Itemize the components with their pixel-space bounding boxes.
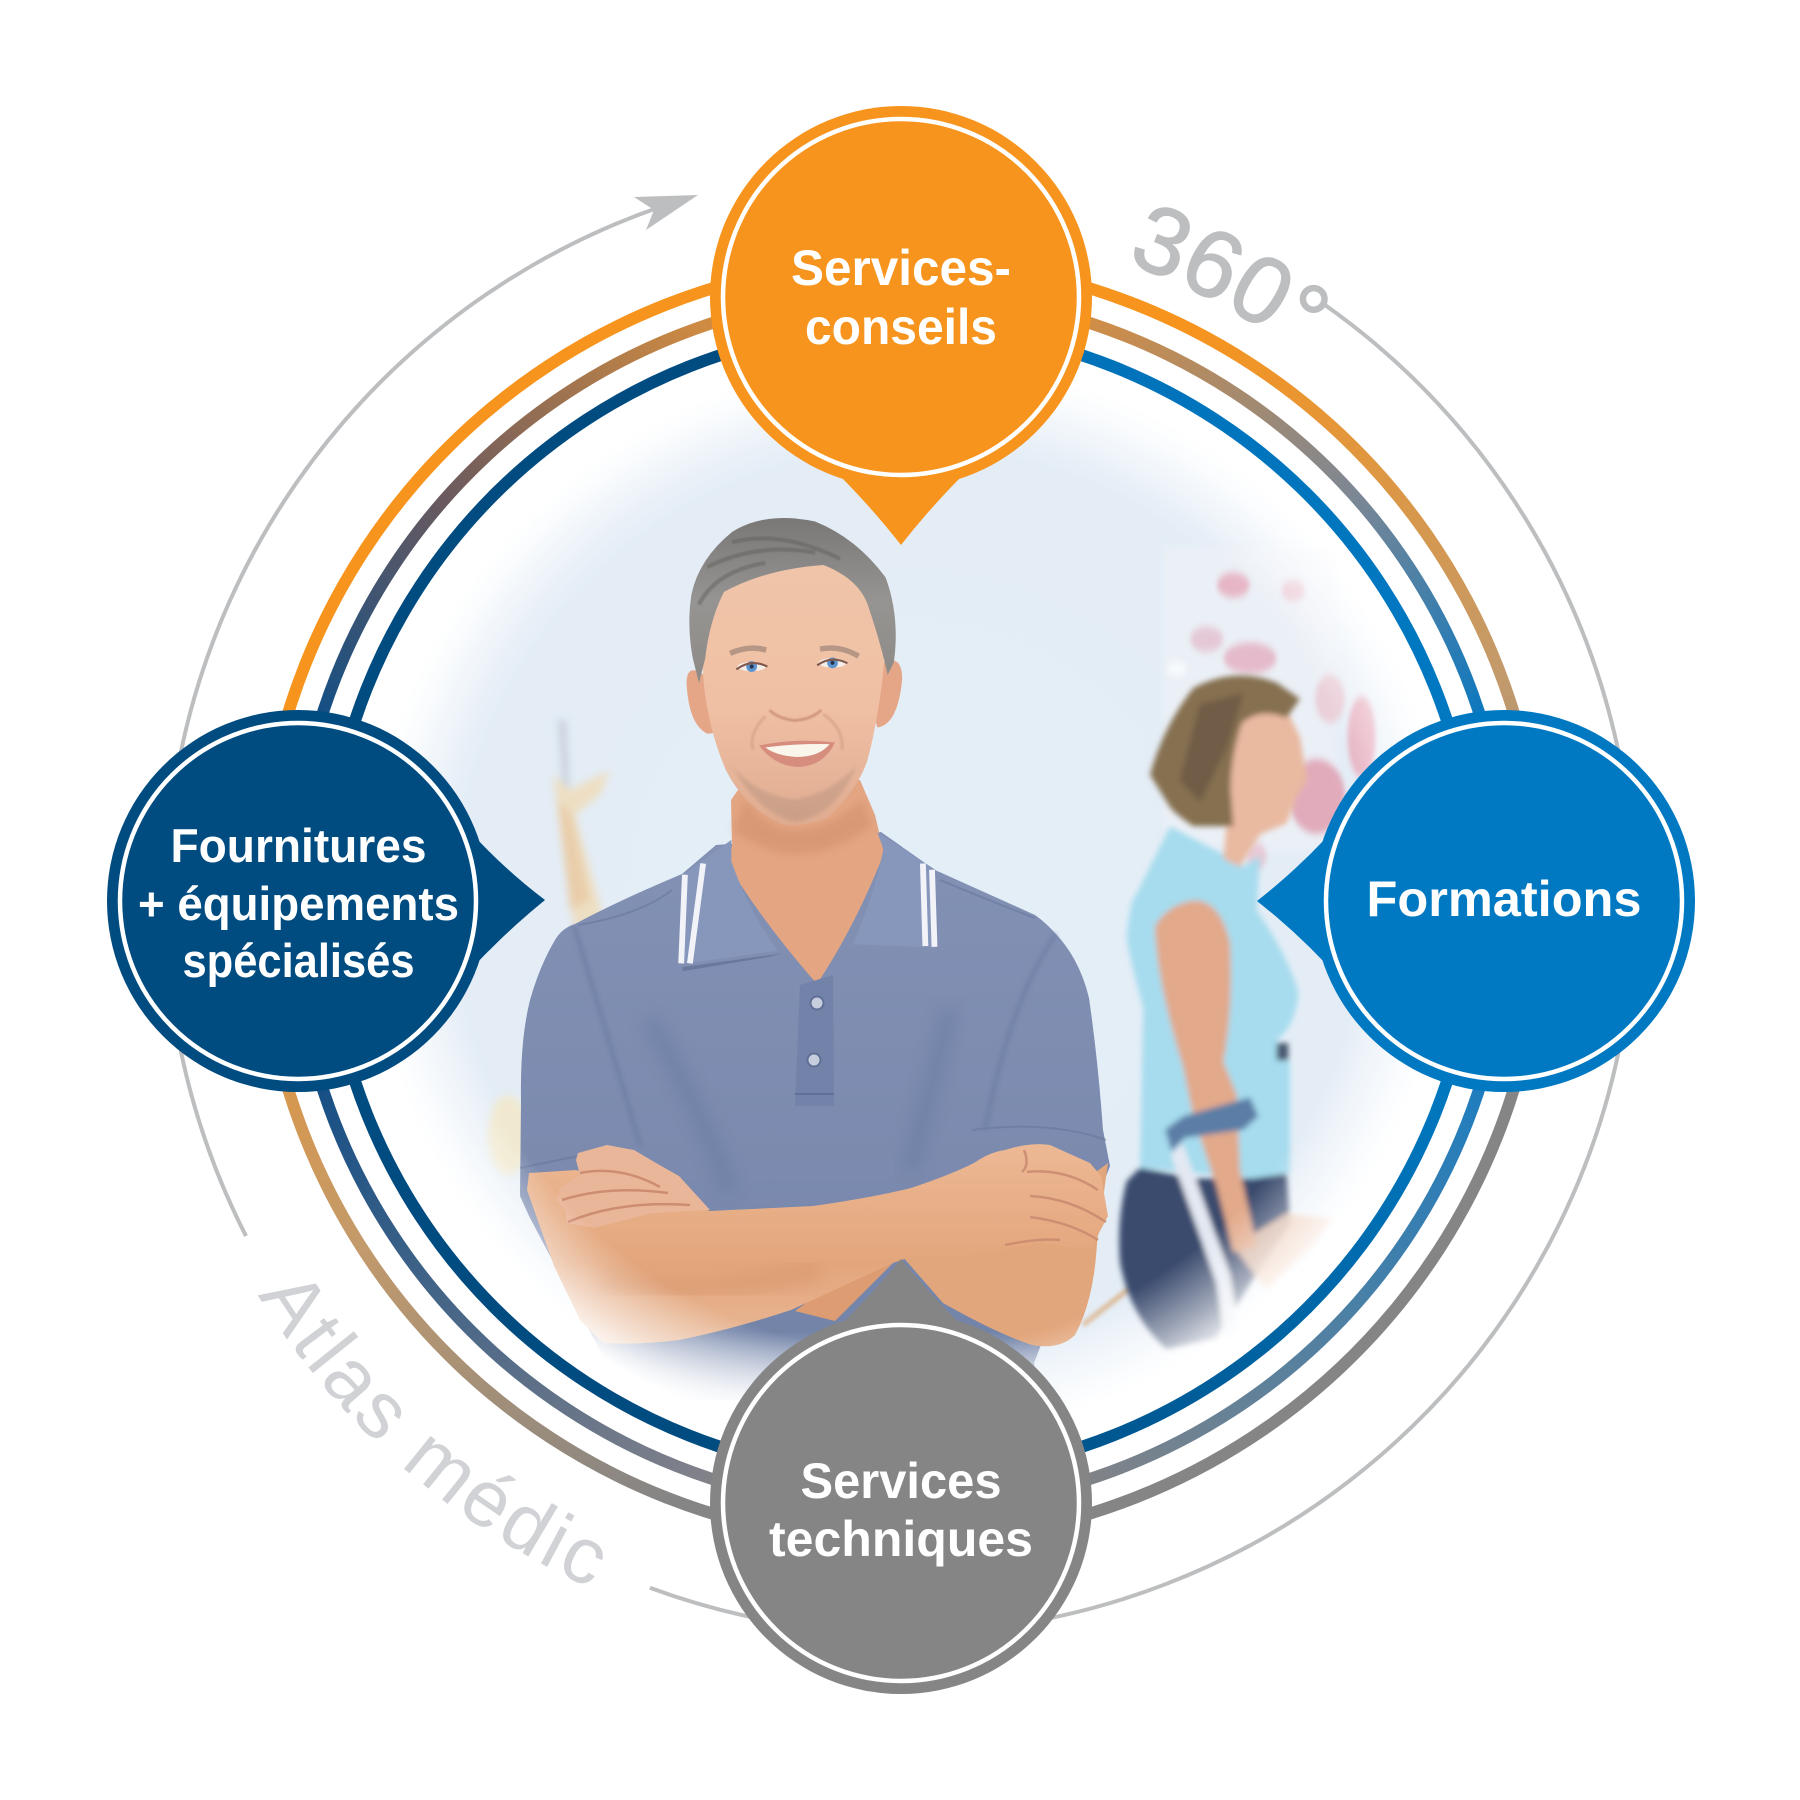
man: teeth	[765, 744, 830, 757]
blurred skeleton model	[488, 720, 610, 1175]
man: smile lines	[752, 714, 842, 749]
woman: hair	[1150, 676, 1300, 826]
man: collar	[680, 832, 936, 971]
bubble: Fournitures + équipements spécialisés	[107, 710, 545, 1092]
bubble: Services-conseils	[710, 106, 1092, 545]
inner ring	[326, 326, 1476, 1476]
man with crossed arms	[520, 518, 1110, 1400]
man: polo shirt	[520, 832, 1110, 1400]
woman: hand	[1233, 1214, 1333, 1290]
arrowhead	[634, 195, 698, 230]
woman: crutch tube	[1177, 1149, 1237, 1366]
man: ears	[687, 670, 715, 734]
text: Fournitures + équipements spécialisés: spécialisés	[182, 934, 414, 987]
floor line	[1083, 1288, 1130, 1325]
man: left hand	[556, 1145, 710, 1228]
man: mouth	[759, 741, 835, 767]
text: Services techniques: techniques	[769, 1511, 1033, 1567]
man: left hand fingers	[562, 1171, 690, 1222]
text: Formations: Formations	[1366, 871, 1642, 927]
arrow ring: left arc with arrowhead	[165, 195, 698, 1236]
label: Atlas médic: Atlas médic	[258, 1284, 603, 1584]
middle ring	[293, 293, 1509, 1509]
man: neck shadow	[730, 806, 868, 852]
woman: top	[1127, 826, 1298, 1179]
woman: trousers	[1119, 1168, 1290, 1349]
label: 360°: 360°	[1134, 207, 1328, 323]
man: face	[702, 565, 884, 825]
man: head	[687, 518, 902, 825]
text: Services-conseils: conseils	[805, 299, 997, 355]
woman with crutch	[1119, 676, 1333, 1366]
arrow ring: right arc	[650, 305, 1634, 1633]
photo: therapist and patient in a clinic	[418, 409, 1398, 1398]
bubble: Services techniques	[710, 1259, 1092, 1694]
text: Services techniques: Services	[800, 1453, 1002, 1509]
text: Services-conseils: Services-	[791, 240, 1011, 296]
man: neck	[728, 780, 884, 984]
woman: belt clip	[1277, 1043, 1288, 1060]
man: right hand highlights and fingers	[1005, 1150, 1106, 1245]
man: brows	[730, 648, 859, 656]
woman: arm	[1155, 900, 1257, 1252]
man: nose	[769, 710, 821, 720]
woman: crutch cuff	[1165, 1097, 1258, 1151]
man: shirt folds and seams	[520, 880, 1106, 1190]
man: back arm	[902, 1163, 1108, 1346]
bubble: Formations	[1257, 710, 1695, 1092]
man: placket and buttons	[795, 975, 834, 1106]
photo background	[420, 411, 1395, 1386]
man: eyes	[736, 657, 847, 672]
text: Fournitures + équipements spécialisés: + équipements	[138, 877, 459, 930]
text: Fournitures + équipements spécialisés: Fournitures	[170, 819, 426, 872]
man: hair strands	[699, 538, 840, 604]
man: front forearm and right hand	[527, 1144, 1108, 1344]
outer ring: orange to gray	[260, 260, 1542, 1542]
man: stubble	[736, 770, 854, 822]
photo edge fade	[330, 330, 1472, 1472]
man: hair	[689, 518, 896, 683]
man: arm shading	[600, 1270, 820, 1288]
woman: face	[1223, 710, 1307, 867]
blurred anatomy poster	[1163, 547, 1376, 870]
infographic: Atlas médic 360 degree services	[107, 106, 1695, 1694]
